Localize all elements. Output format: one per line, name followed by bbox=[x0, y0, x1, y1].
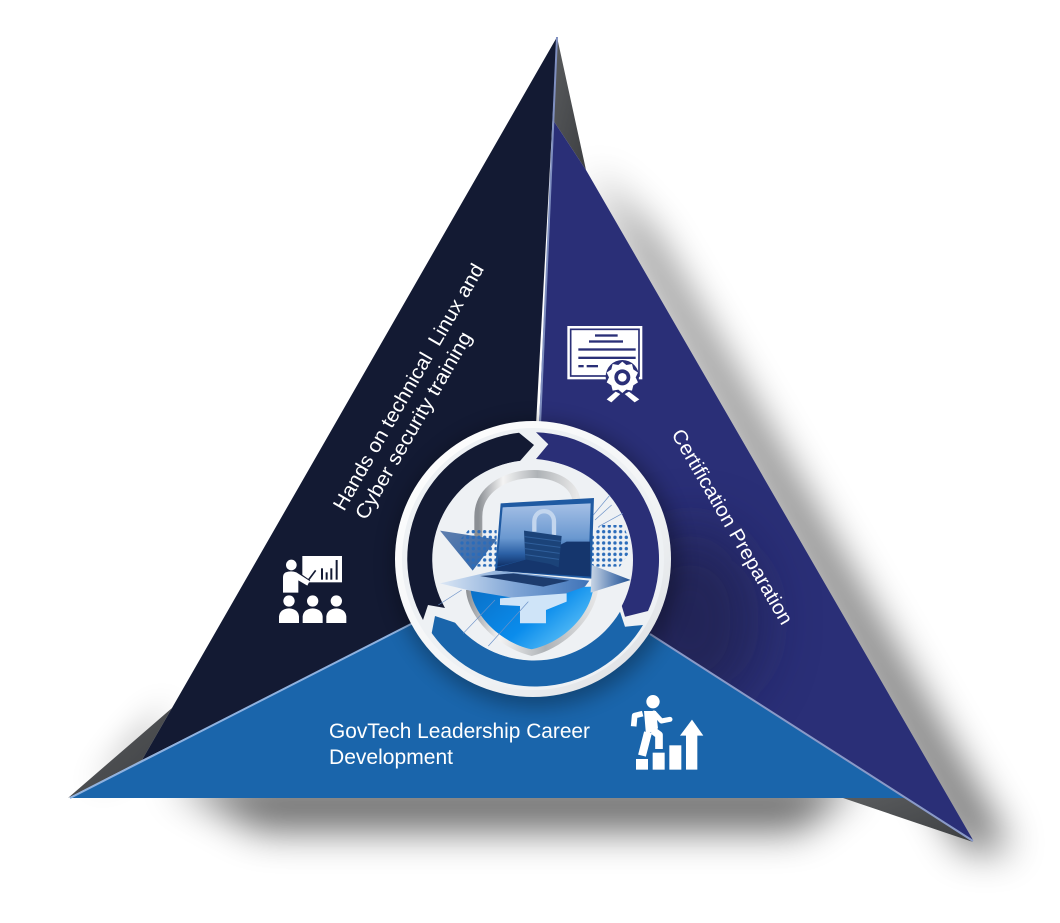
panel: grey fold top bbox=[553, 37, 586, 170]
heading: certification preparation: Certification Preparation bbox=[667, 426, 797, 629]
panel: blue career development bbox=[70, 560, 905, 798]
padlock shackle bbox=[478, 474, 577, 553]
inner disc bbox=[433, 460, 633, 660]
divider line: lower right bbox=[650, 634, 973, 841]
ring shadow bbox=[393, 421, 679, 707]
paper sheet bbox=[500, 593, 567, 623]
arc arrow: navy bbox=[407, 433, 534, 620]
screen padlock bbox=[524, 511, 562, 567]
central ring emblem bbox=[393, 421, 679, 707]
halftone dots right bbox=[592, 525, 629, 567]
drop shadow: bottom edge bbox=[170, 780, 860, 830]
fine rays bbox=[438, 495, 623, 646]
inner ring face bbox=[402, 428, 664, 690]
heading: career development: GovTech Leadership Career bbox=[329, 720, 590, 743]
laptop base bbox=[440, 571, 589, 602]
drop shadow: right edge bbox=[590, 170, 1010, 850]
divider line: lower left bbox=[70, 622, 415, 798]
white outer ring bbox=[395, 421, 671, 697]
heading: hands on training: Cyber security training bbox=[351, 328, 477, 524]
panel: indigo certification bbox=[530, 120, 973, 840]
panel: dark navy hands-on training bbox=[142, 37, 557, 760]
heading: career development bbox=[329, 720, 590, 769]
halftone dots left bbox=[460, 530, 497, 567]
arc arrow: indigo bbox=[536, 432, 659, 617]
panel: grey fold right bbox=[843, 798, 973, 842]
shield bbox=[466, 587, 598, 656]
left triangle bbox=[440, 531, 497, 571]
panel: grey fold left bbox=[68, 708, 172, 798]
icon: person climbing stairs with arrow bbox=[634, 695, 703, 770]
heading: hands on training: Hands on technical Linux and bbox=[329, 260, 489, 514]
divider line: vertical bbox=[540, 37, 557, 425]
laptop screen bbox=[495, 498, 594, 579]
panel: indigo inner shading bbox=[620, 530, 760, 710]
security illustration bbox=[438, 474, 631, 656]
right triangle bbox=[591, 565, 631, 593]
icon: presenter and audience bbox=[279, 556, 346, 623]
icon: certificate bbox=[567, 326, 642, 402]
arc arrow: blue bbox=[432, 612, 643, 687]
drop shadow: left fold bbox=[90, 700, 170, 790]
heading: career development: Development bbox=[329, 746, 453, 769]
